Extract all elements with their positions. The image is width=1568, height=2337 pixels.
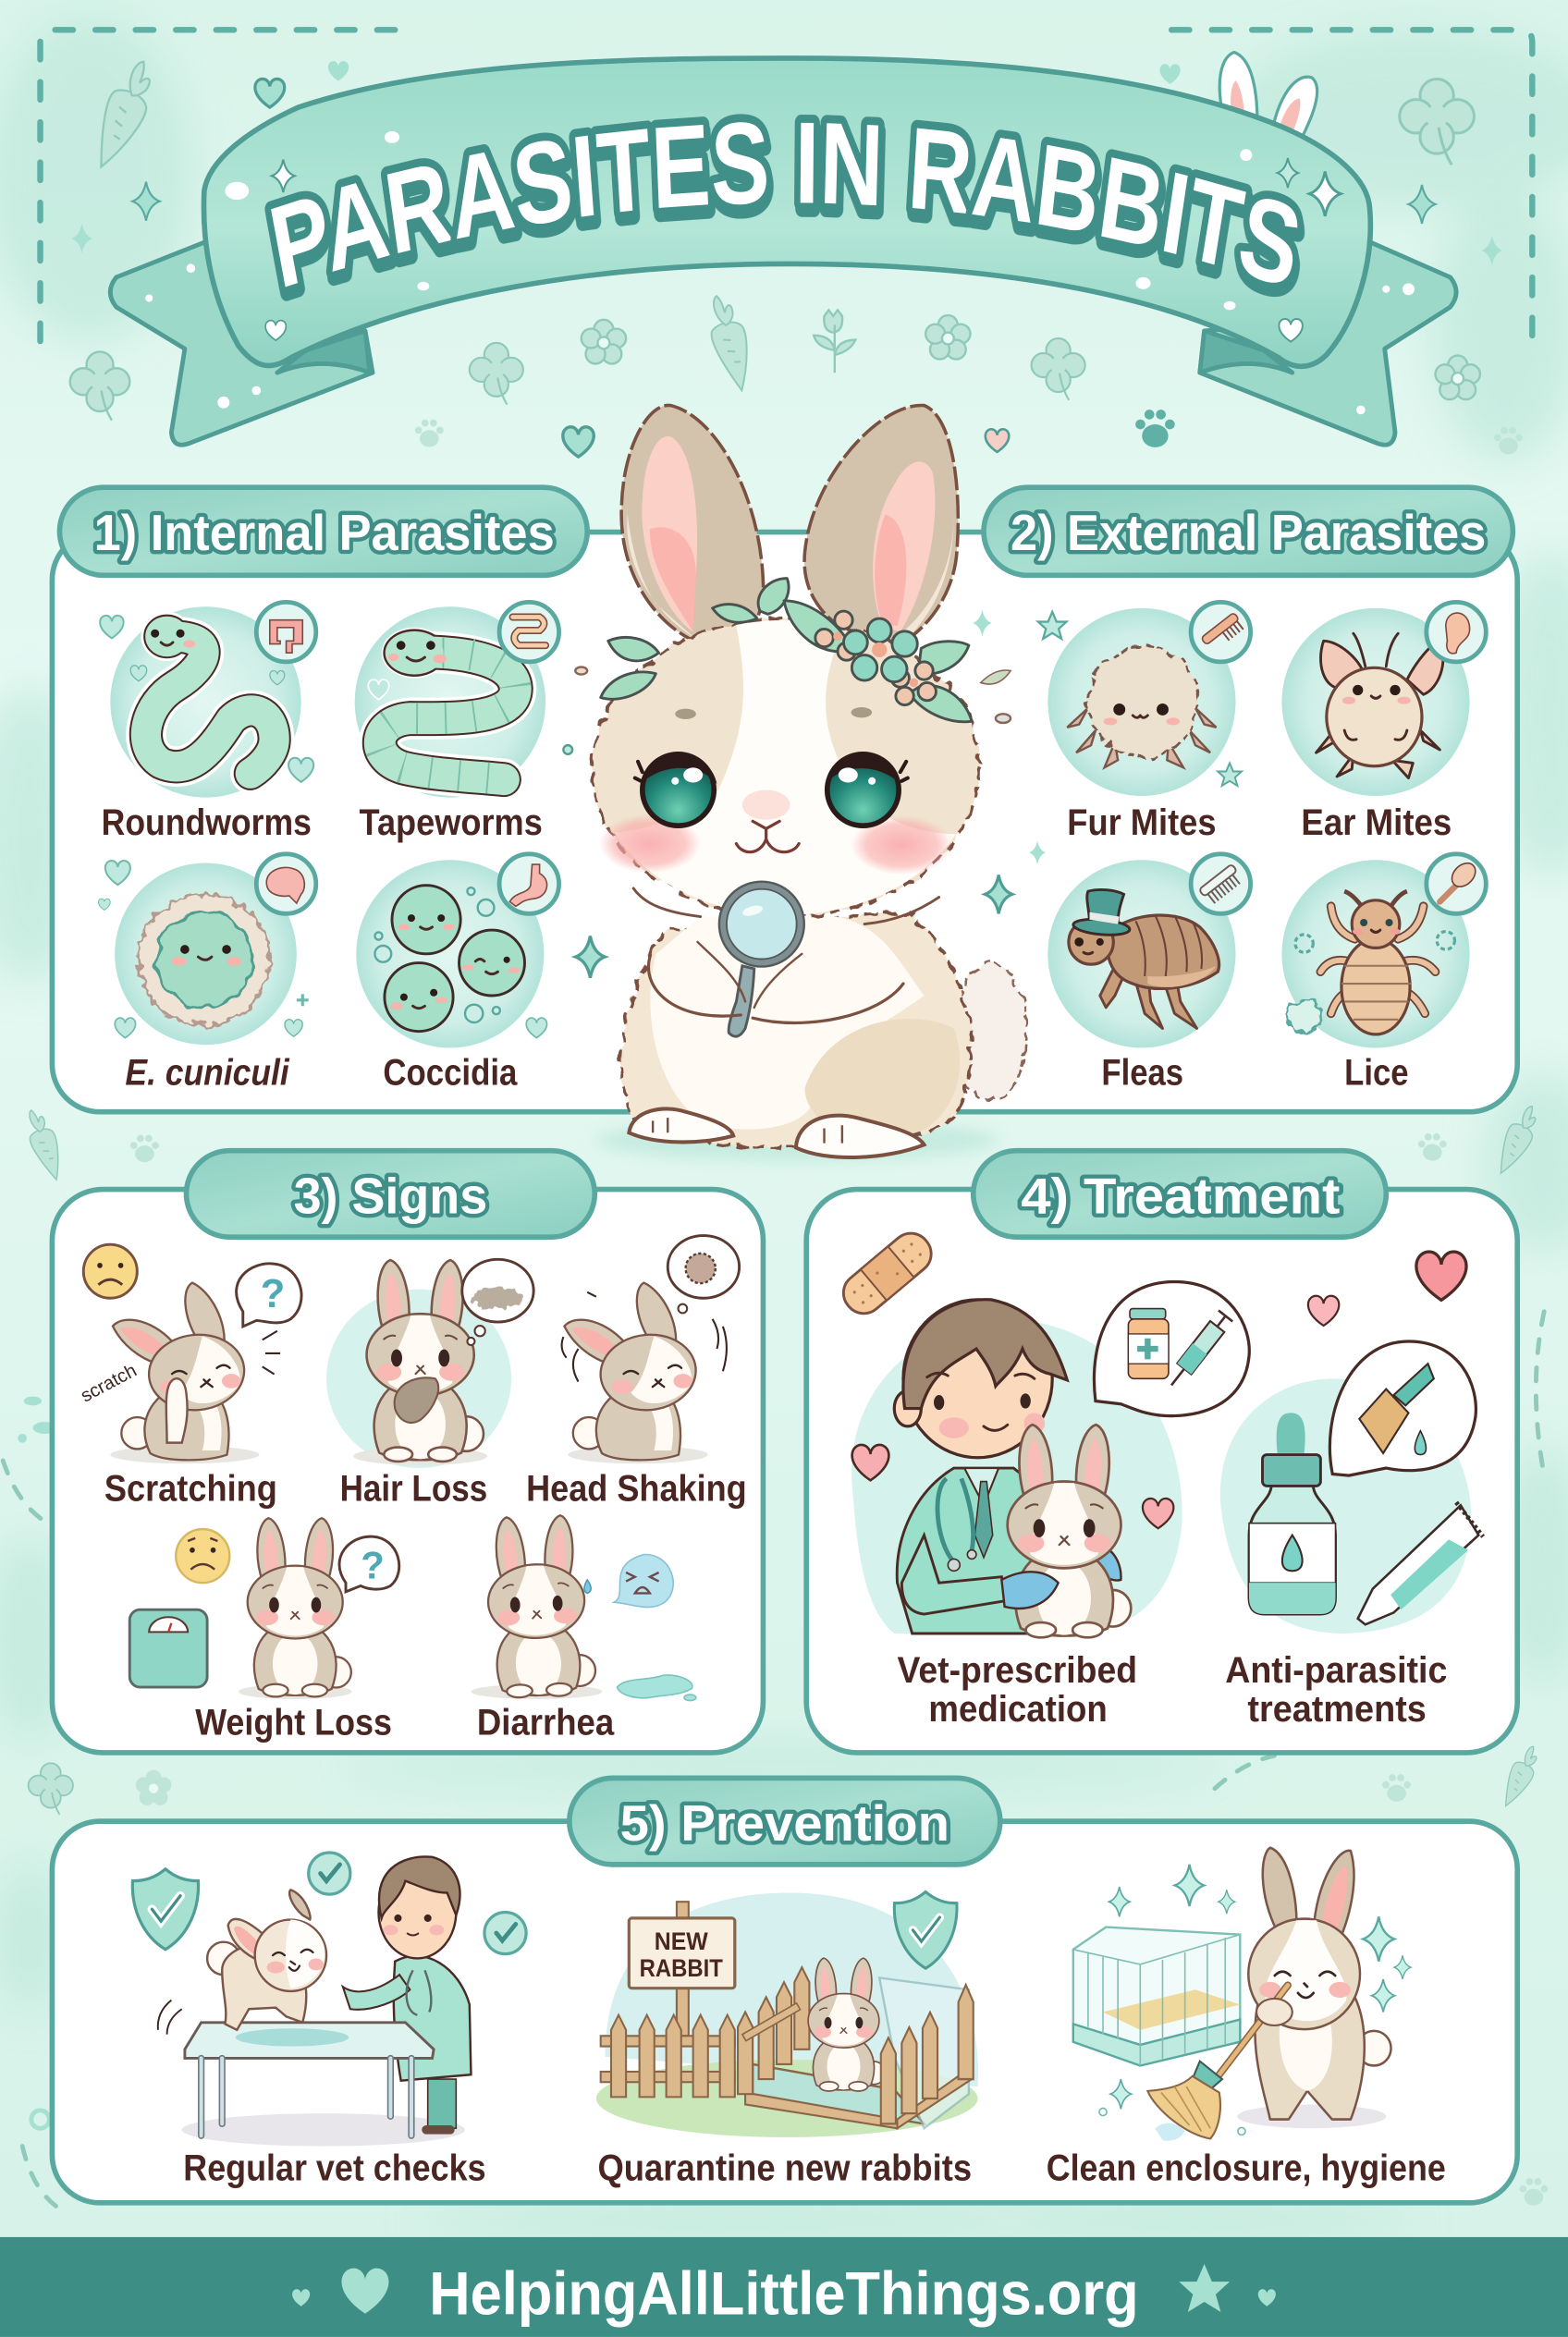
heading: treatment [974,1151,1386,1237]
label: Vet-prescribed medication [898,1649,1137,1730]
label: Hair Loss: Hair Loss [340,1468,487,1510]
E. cuniculi [98,861,309,1045]
sign: scratching [78,1244,301,1463]
fleas [1047,860,1235,1047]
treatment: dropper bottle and tube [1220,1252,1483,1633]
label: Diarrhea: Diarrhea [477,1702,615,1744]
sign: head shaking [562,1236,740,1463]
label: Quarantine new rabbits: Quarantine new rabbits [597,2147,972,2189]
lice [1281,860,1470,1047]
sign: diarrhea [471,1514,696,1701]
heading: external parasites: 2) External Parasites [1011,504,1486,561]
feet [629,1108,925,1157]
main title banner [145,58,1415,414]
panel: treatment [806,1190,1517,1753]
footer icons [292,2264,1276,2314]
label: E. cuniculi: E. cuniculi [125,1052,289,1094]
sign text: NEW RABBIT: NEW [655,1927,709,1955]
label: Ear Mites: Ear Mites [1301,801,1452,843]
heading: prevention: 5) Prevention [620,1794,949,1852]
tail [955,963,1027,1100]
label: Coccidia: Coccidia [383,1052,518,1094]
heading: signs: 3) Signs [294,1167,487,1224]
head [589,611,984,924]
label: Vet-prescribed medication: medication [928,1688,1108,1730]
prevention: quarantine new rabbits [596,1891,978,2137]
body [621,912,972,1149]
heading: signs [187,1151,594,1237]
label: Tapeworms: Tapeworms [360,801,543,843]
heading: internal parasites: 1) Internal Parasites [94,504,555,561]
sign text: NEW RABBIT: RABBIT [640,1954,723,1982]
label: Anti-parasitic treatments [1225,1649,1447,1730]
prevention: regular vet checks [132,1853,526,2147]
badge: tapeworm [499,602,559,662]
treatment: medicine speech bubble [1094,1282,1249,1416]
label: Weight Loss: Weight Loss [195,1702,392,1744]
ears [621,405,958,647]
label: Clean enclosure, hygiene: Clean enclosure, hygiene [1047,2147,1446,2189]
heading: internal parasites [59,487,587,575]
label: Vet-prescribed medication: Vet-prescribed [898,1649,1137,1691]
treatment: vet with rabbit [851,1300,1182,1637]
badge: brain [256,854,316,913]
flower crown [601,579,972,722]
badge: stomach [499,854,559,913]
footer website: HelpingAllLittleThings.org [429,2260,1139,2329]
ear mites [1281,608,1470,796]
tapeworms [355,606,545,798]
title: PARASITES IN RABBITS [264,114,1305,301]
label: Anti-parasitic treatments: treatments [1247,1688,1427,1730]
label: Lice: Lice [1344,1052,1408,1094]
label: Regular vet checks: Regular vet checks [183,2147,486,2189]
label: Head Shaking: Head Shaking [526,1468,747,1510]
label: Roundworms: Roundworms [102,801,312,843]
badge: comb [1191,602,1251,662]
coccidia [356,860,547,1047]
heading: treatment: 4) Treatment [1021,1167,1340,1224]
roundworms [100,606,313,798]
banner tails [110,240,1456,445]
badge: ear [1427,602,1486,662]
badge: comb 2 [1191,854,1251,913]
sign: scratching: ? [261,1272,285,1316]
heading: external parasites [984,487,1513,575]
sign text: NEW RABBIT [640,1927,723,1982]
bunny ears behind banner [1219,52,1317,161]
panel: prevention [52,1821,1517,2203]
magnifying glass handle [729,966,754,1036]
main rabbit with magnifying glass [563,405,1046,1161]
arms [648,942,903,1022]
panel: signs [52,1190,763,1753]
label: Scratching: Scratching [104,1468,277,1510]
prevention: clean enclosure, hygiene [1073,1848,1411,2141]
badge: brush [1427,854,1486,913]
icon: bandage [836,1226,939,1321]
fur mites [1038,608,1242,796]
magnifying glass [719,882,804,967]
badge: intestine [256,602,316,662]
panel: internal and external parasites [52,532,1517,1112]
sign: scratching: scratch [78,1361,141,1407]
label: Fur Mites: Fur Mites [1067,801,1217,843]
sparkles around rabbit [563,609,1046,978]
footer bar [0,2237,1568,2337]
heading: prevention [570,1778,1000,1865]
label: Anti-parasitic treatments: Anti-parasitic [1225,1649,1447,1691]
dashed decorative frame [41,30,1532,346]
sign: weight loss [129,1518,399,1699]
label: Fleas: Fleas [1101,1052,1183,1094]
sign: hair loss [326,1259,533,1468]
sign: weight loss: ? [361,1543,385,1586]
